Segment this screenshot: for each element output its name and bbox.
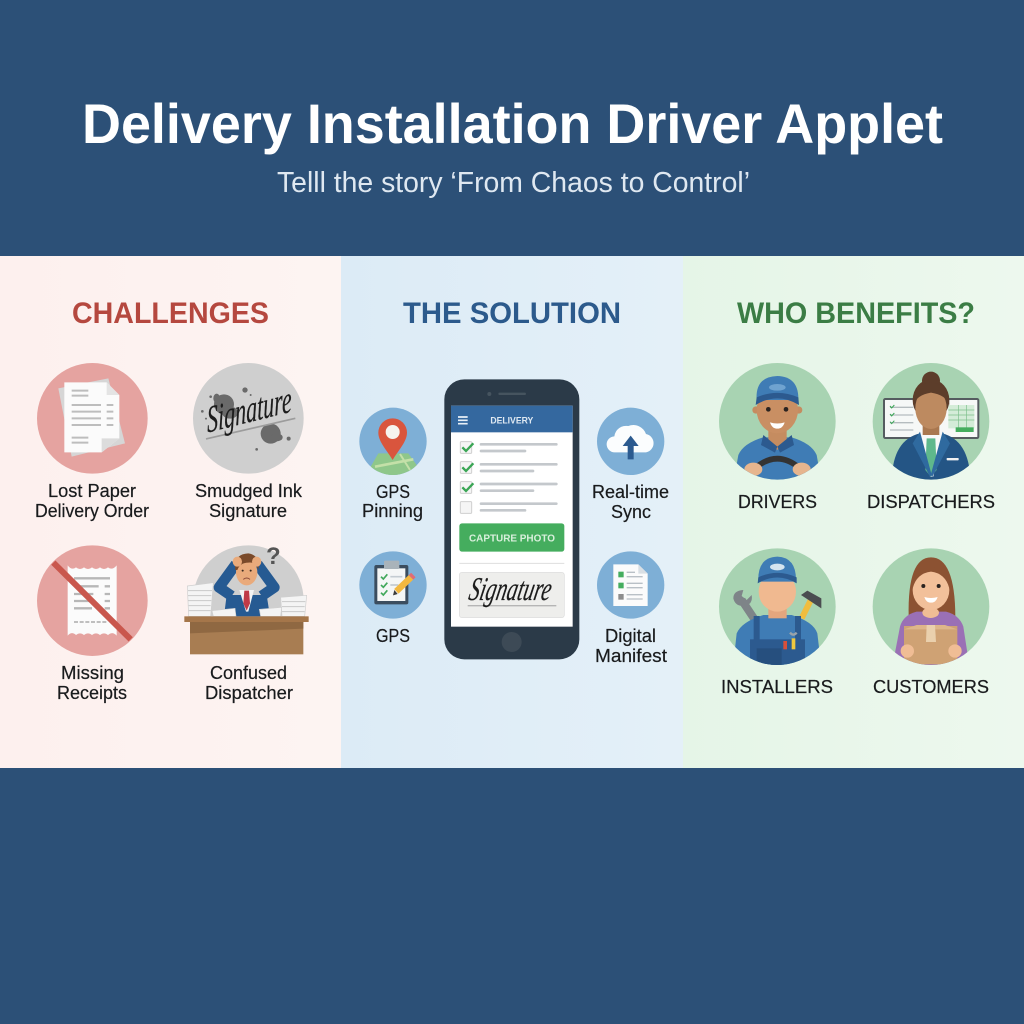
- label: gps pinning: [362, 482, 423, 521]
- subtitle: Telll the story ‘From Chaos to Control’: [277, 167, 750, 199]
- icon: cloud sync: [597, 408, 664, 475]
- label: digital manifest: Digital: [605, 626, 656, 646]
- icon: smudged signature: Signature: [206, 378, 292, 442]
- label: gps: GPS: [376, 626, 410, 646]
- label: lost paper delivery order: [35, 481, 149, 521]
- label: missing receipts: Missing: [61, 663, 124, 683]
- label: digital manifest: [595, 626, 667, 666]
- panel: the solution: [341, 256, 683, 768]
- signature box: [459, 571, 564, 618]
- icon: missing receipts: [37, 545, 148, 656]
- label: confused dispatcher: [205, 663, 293, 703]
- icon: driver: [719, 363, 836, 483]
- icon: digital manifest: [597, 551, 664, 619]
- label: lost paper delivery order: Lost Paper: [48, 481, 136, 501]
- icon: smudged signature: [193, 363, 304, 474]
- label: gps pinning: GPS: [376, 482, 410, 502]
- phone header: DELIVERY: [490, 416, 533, 426]
- icon: customer: [873, 548, 989, 670]
- heading: challenges: CHALLENGES: [72, 297, 269, 330]
- title: Delivery Installation Driver Applet: [82, 92, 943, 155]
- label: confused dispatcher: Dispatcher: [205, 683, 293, 703]
- label: missing receipts: Receipts: [57, 683, 127, 703]
- label: smudged ink signature: Signature: [209, 501, 287, 521]
- label: smudged ink signature: Smudged Ink: [195, 481, 303, 501]
- label: missing receipts: [57, 663, 127, 703]
- phone header: [451, 406, 573, 432]
- phone mockup: [444, 379, 579, 659]
- capture photo button: [459, 523, 564, 552]
- label: lost paper delivery order: Delivery Order: [35, 501, 149, 521]
- icon: lost paper: [37, 363, 148, 474]
- label: real-time sync: Real-time: [592, 482, 669, 502]
- heading: the solution: THE SOLUTION: [403, 297, 621, 330]
- icon: dispatcher: [873, 363, 989, 483]
- icon: confused dispatcher: ?: [266, 543, 281, 570]
- icon: installer: [719, 548, 836, 670]
- delivery checklist: [460, 442, 556, 513]
- label: customers: CUSTOMERS: [873, 677, 989, 697]
- panel: who benefits: [683, 256, 1024, 768]
- signature box: Signature: [466, 571, 555, 608]
- label: real-time sync: Sync: [611, 502, 651, 522]
- heading: who benefits: WHO BENEFITS?: [737, 297, 975, 330]
- label: confused dispatcher: Confused: [210, 663, 287, 683]
- label: real-time sync: [592, 482, 669, 522]
- label: gps pinning: Pinning: [362, 501, 423, 521]
- label: installers: INSTALLERS: [721, 677, 833, 697]
- label: digital manifest: Manifest: [595, 646, 667, 666]
- label: drivers: DRIVERS: [738, 492, 817, 512]
- icon: clipboard checklist: [359, 551, 427, 619]
- capture photo button: CAPTURE PHOTO: [469, 534, 555, 545]
- panel: challenges: [0, 256, 341, 768]
- label: dispatchers: DISPATCHERS: [867, 492, 995, 512]
- label: smudged ink signature: [195, 481, 303, 521]
- icon: confused dispatcher: [184, 543, 309, 656]
- icon: gps pin: [359, 408, 427, 477]
